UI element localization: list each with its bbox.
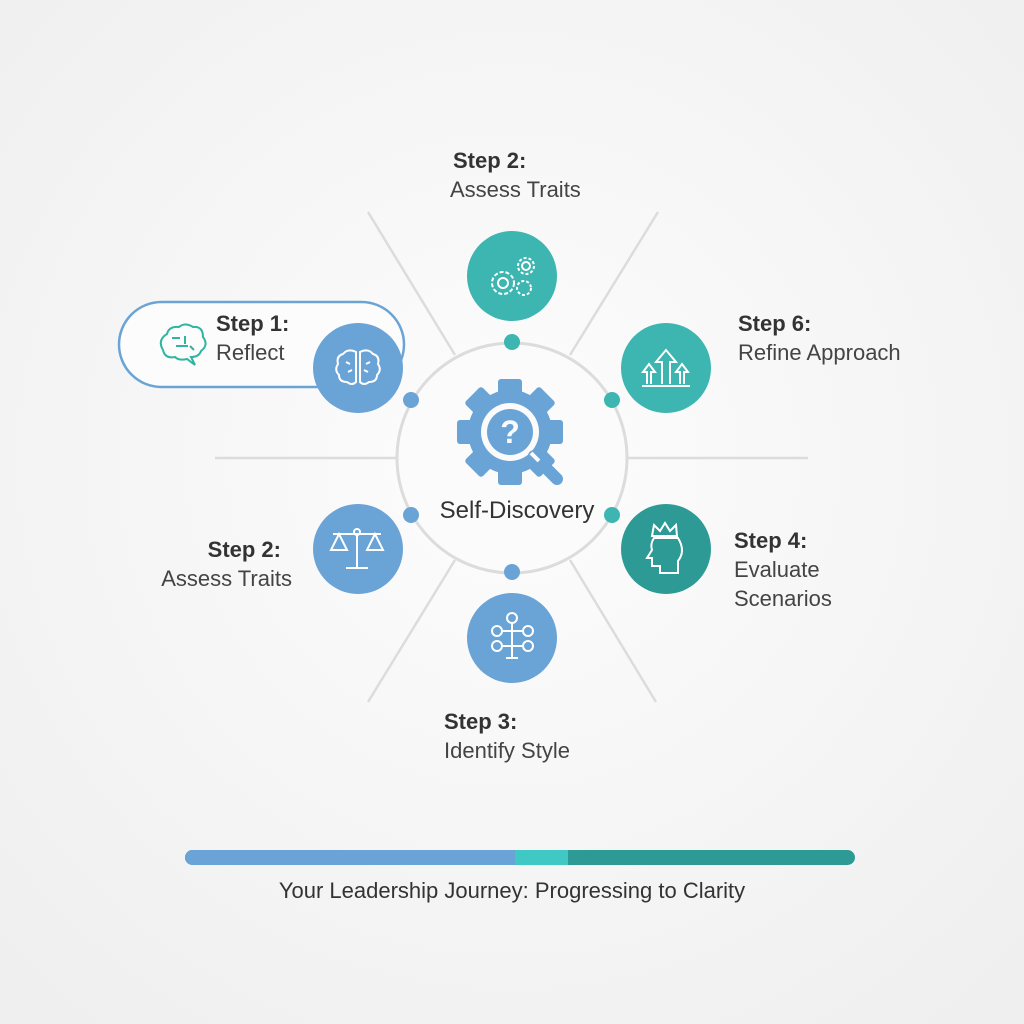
label: step 3: Identify Style (444, 738, 570, 763)
panel: step 1 pill (119, 302, 404, 387)
center label: Self-Discovery (440, 497, 594, 524)
label: step 2 top: Assess Traits (450, 177, 581, 202)
caption: Your Leadership Journey: Progressing to Clarity (279, 878, 745, 903)
node: step 1 brain (313, 323, 403, 413)
label: step 2 left: Assess Traits (161, 566, 292, 591)
node: step 6 arrows (621, 323, 711, 413)
panel: step 1 pill: Reflect (216, 340, 284, 365)
label: step 4 (734, 528, 832, 611)
label: step 2 top: Step 2: (453, 148, 526, 173)
label: step 3 (444, 709, 570, 763)
node: step 2 scales (313, 504, 403, 594)
label: step 6 (738, 311, 901, 365)
label: step 4: Evaluate (734, 557, 820, 582)
label: step 6: Refine Approach (738, 340, 901, 365)
label: step 4: Scenarios (734, 586, 832, 611)
progress bar (185, 850, 855, 865)
label: step 2 top (450, 148, 581, 202)
label: step 2 left: Step 2: (208, 537, 281, 562)
center hub (397, 343, 627, 573)
panel: step 1 pill: Step 1: (216, 311, 289, 336)
icon: gear with question magnifier (457, 379, 563, 485)
label: step 3: Step 3: (444, 709, 517, 734)
node: step 2 top gears (467, 231, 557, 321)
icon: brain speech (161, 324, 206, 365)
connector dots (403, 334, 620, 580)
node: step 3 tree (467, 593, 557, 683)
label: step 6: Step 6: (738, 311, 811, 336)
node: step 4 crown head (621, 504, 711, 594)
label: step 4: Step 4: (734, 528, 807, 553)
icon: gear with question magnifier: ? (500, 414, 520, 450)
label: step 2 left (161, 537, 292, 591)
